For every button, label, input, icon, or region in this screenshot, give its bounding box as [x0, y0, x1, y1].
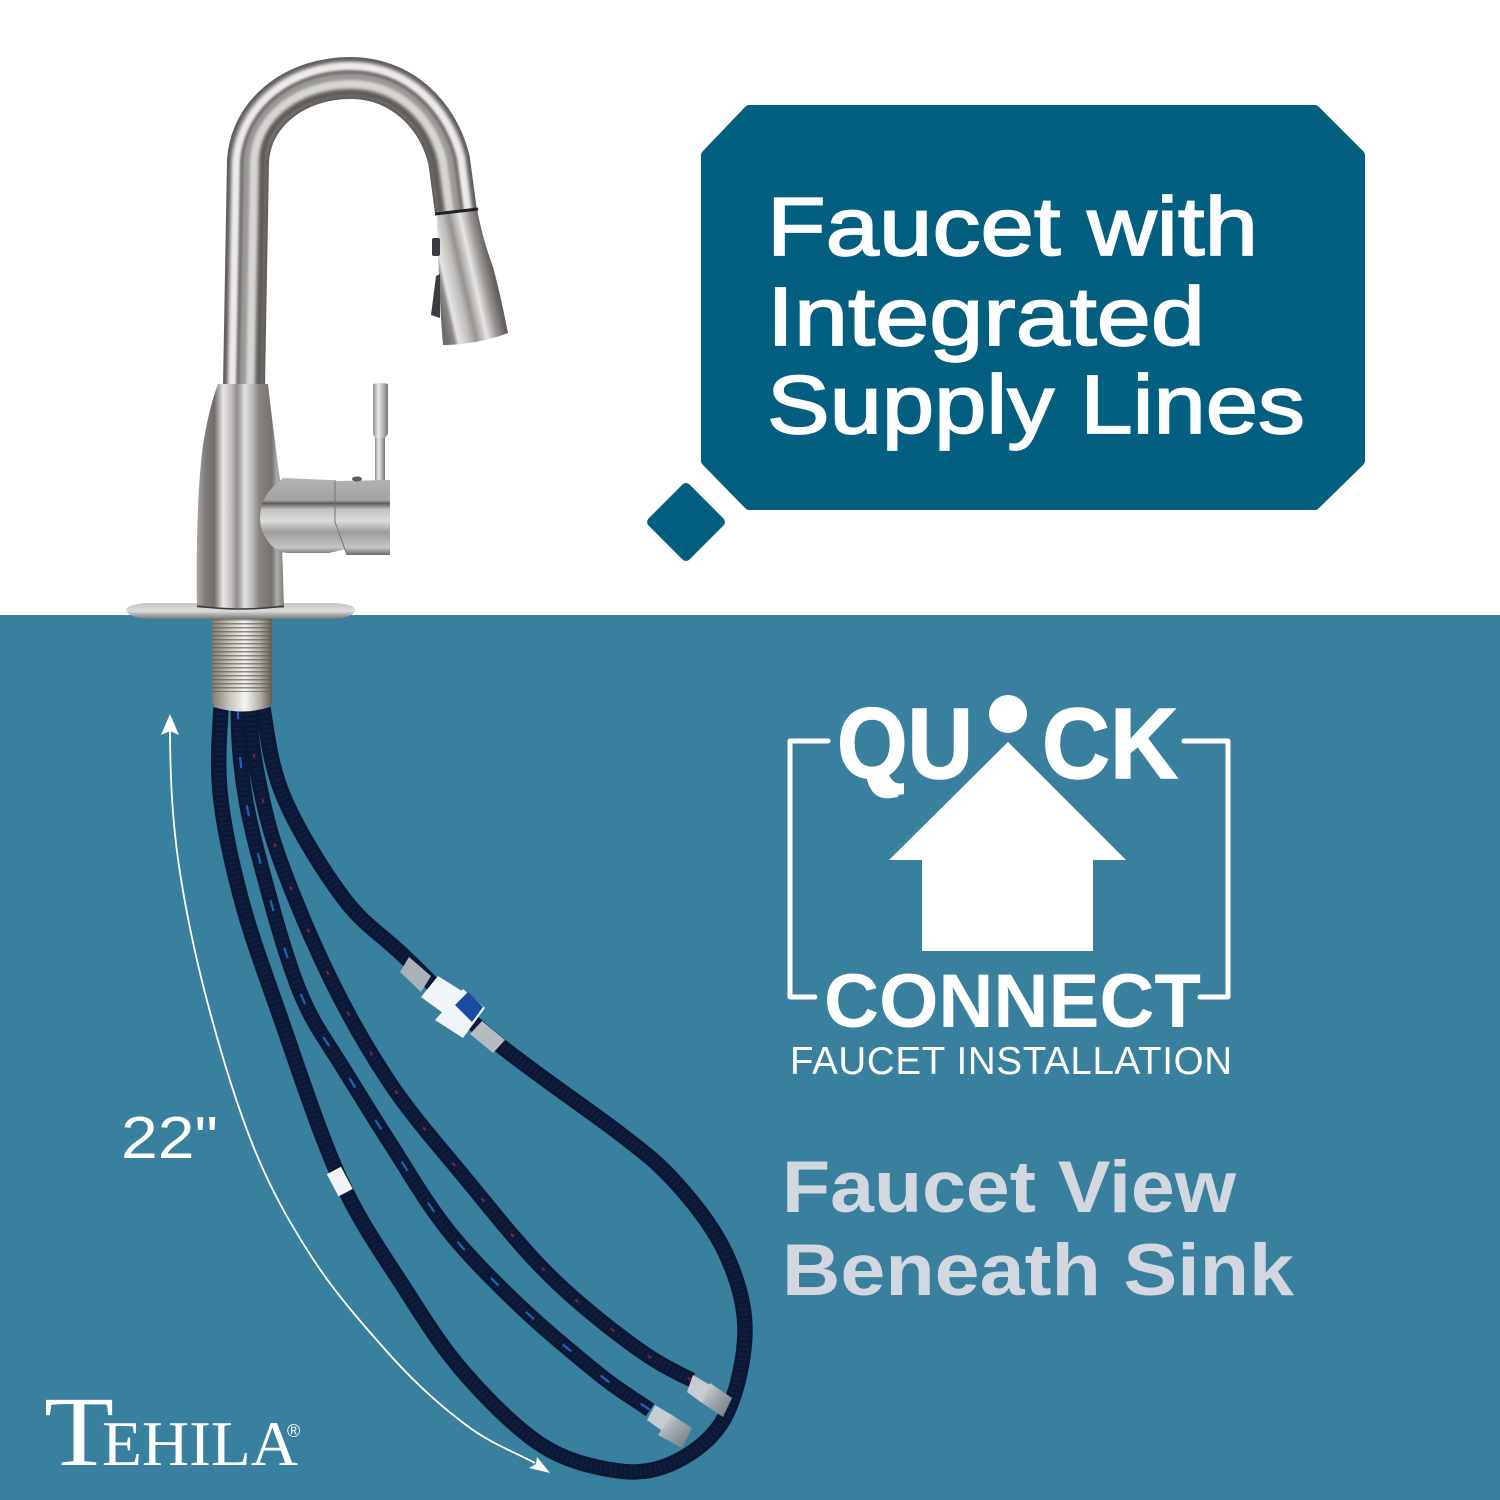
connector lower metal sleeve [470, 1021, 505, 1053]
measurement label: 22" [121, 1105, 218, 1171]
logo bracket [790, 741, 1228, 997]
logo house [889, 742, 1126, 951]
handle joint seam [335, 481, 347, 555]
bubble heading: Supply Lines [767, 358, 1305, 451]
brand logo: Tehila: T [44, 1376, 114, 1487]
handle set screw [352, 476, 362, 482]
caption: faucet view beneath sink: Faucet View [782, 1147, 1236, 1228]
bubble body [701, 105, 1365, 510]
faucet body [197, 384, 284, 608]
logo word CK: CK [1042, 688, 1178, 800]
handle arm [260, 478, 330, 553]
ferrule [647, 1405, 672, 1433]
handle cylinder [335, 480, 390, 555]
Quick Connect logo [790, 688, 1232, 1083]
ferrule [687, 1375, 710, 1403]
logo dot [989, 695, 1027, 733]
handle joint [328, 480, 345, 553]
bubble heading: Integrated [767, 270, 1205, 363]
brand logo: Tehila: ® [287, 1421, 300, 1441]
sprayer collar ring [435, 209, 478, 214]
hex nut [658, 1415, 692, 1448]
faucet [126, 66, 508, 712]
Q tail [872, 766, 904, 795]
supply hoses [219, 708, 745, 1472]
hose end fitting: red line [687, 1375, 732, 1417]
deck plate [126, 603, 355, 619]
spout arch [232, 66, 468, 386]
brand logo: Tehila [44, 1376, 300, 1487]
hose: blue-striped line [238, 708, 650, 1410]
body base seam [197, 606, 284, 609]
hex nut [702, 1383, 732, 1417]
brand logo: Tehila: EHILA [102, 1408, 298, 1479]
hose label band [327, 1167, 353, 1196]
logo word CONNECT: CONNECT [824, 959, 1201, 1044]
bubble tail diamond [645, 481, 727, 563]
sprayer trigger [431, 274, 440, 318]
background: under-sink teal panel [0, 615, 1500, 1500]
quick connector on hose [400, 957, 505, 1053]
hose: red-striped line [250, 708, 692, 1380]
connector white body [421, 976, 465, 1013]
measurement arrow [161, 714, 550, 1473]
logo word QU: QU [837, 688, 973, 800]
hose: long looping line with quick connector [219, 708, 745, 1472]
pull-down sprayer head [437, 209, 508, 345]
bubble heading [767, 180, 1305, 451]
connector white clip [435, 989, 485, 1038]
connector blue button [455, 992, 483, 1022]
hose end fitting: blue line [647, 1405, 692, 1448]
bubble heading: Faucet with [767, 180, 1258, 273]
threaded mounting shank [212, 619, 272, 712]
logo subtitle: FAUCET INSTALLATION [790, 1040, 1232, 1083]
sprayer button [432, 238, 440, 256]
caption: faucet view beneath sink [782, 1147, 1294, 1311]
connector upper metal sleeve [400, 957, 431, 992]
caption: faucet view beneath sink: Beneath Sink [782, 1230, 1294, 1311]
arrowhead bottom [529, 1457, 550, 1473]
handle lever [373, 383, 388, 482]
speech bubble [645, 105, 1365, 563]
arrowhead top [161, 714, 179, 735]
